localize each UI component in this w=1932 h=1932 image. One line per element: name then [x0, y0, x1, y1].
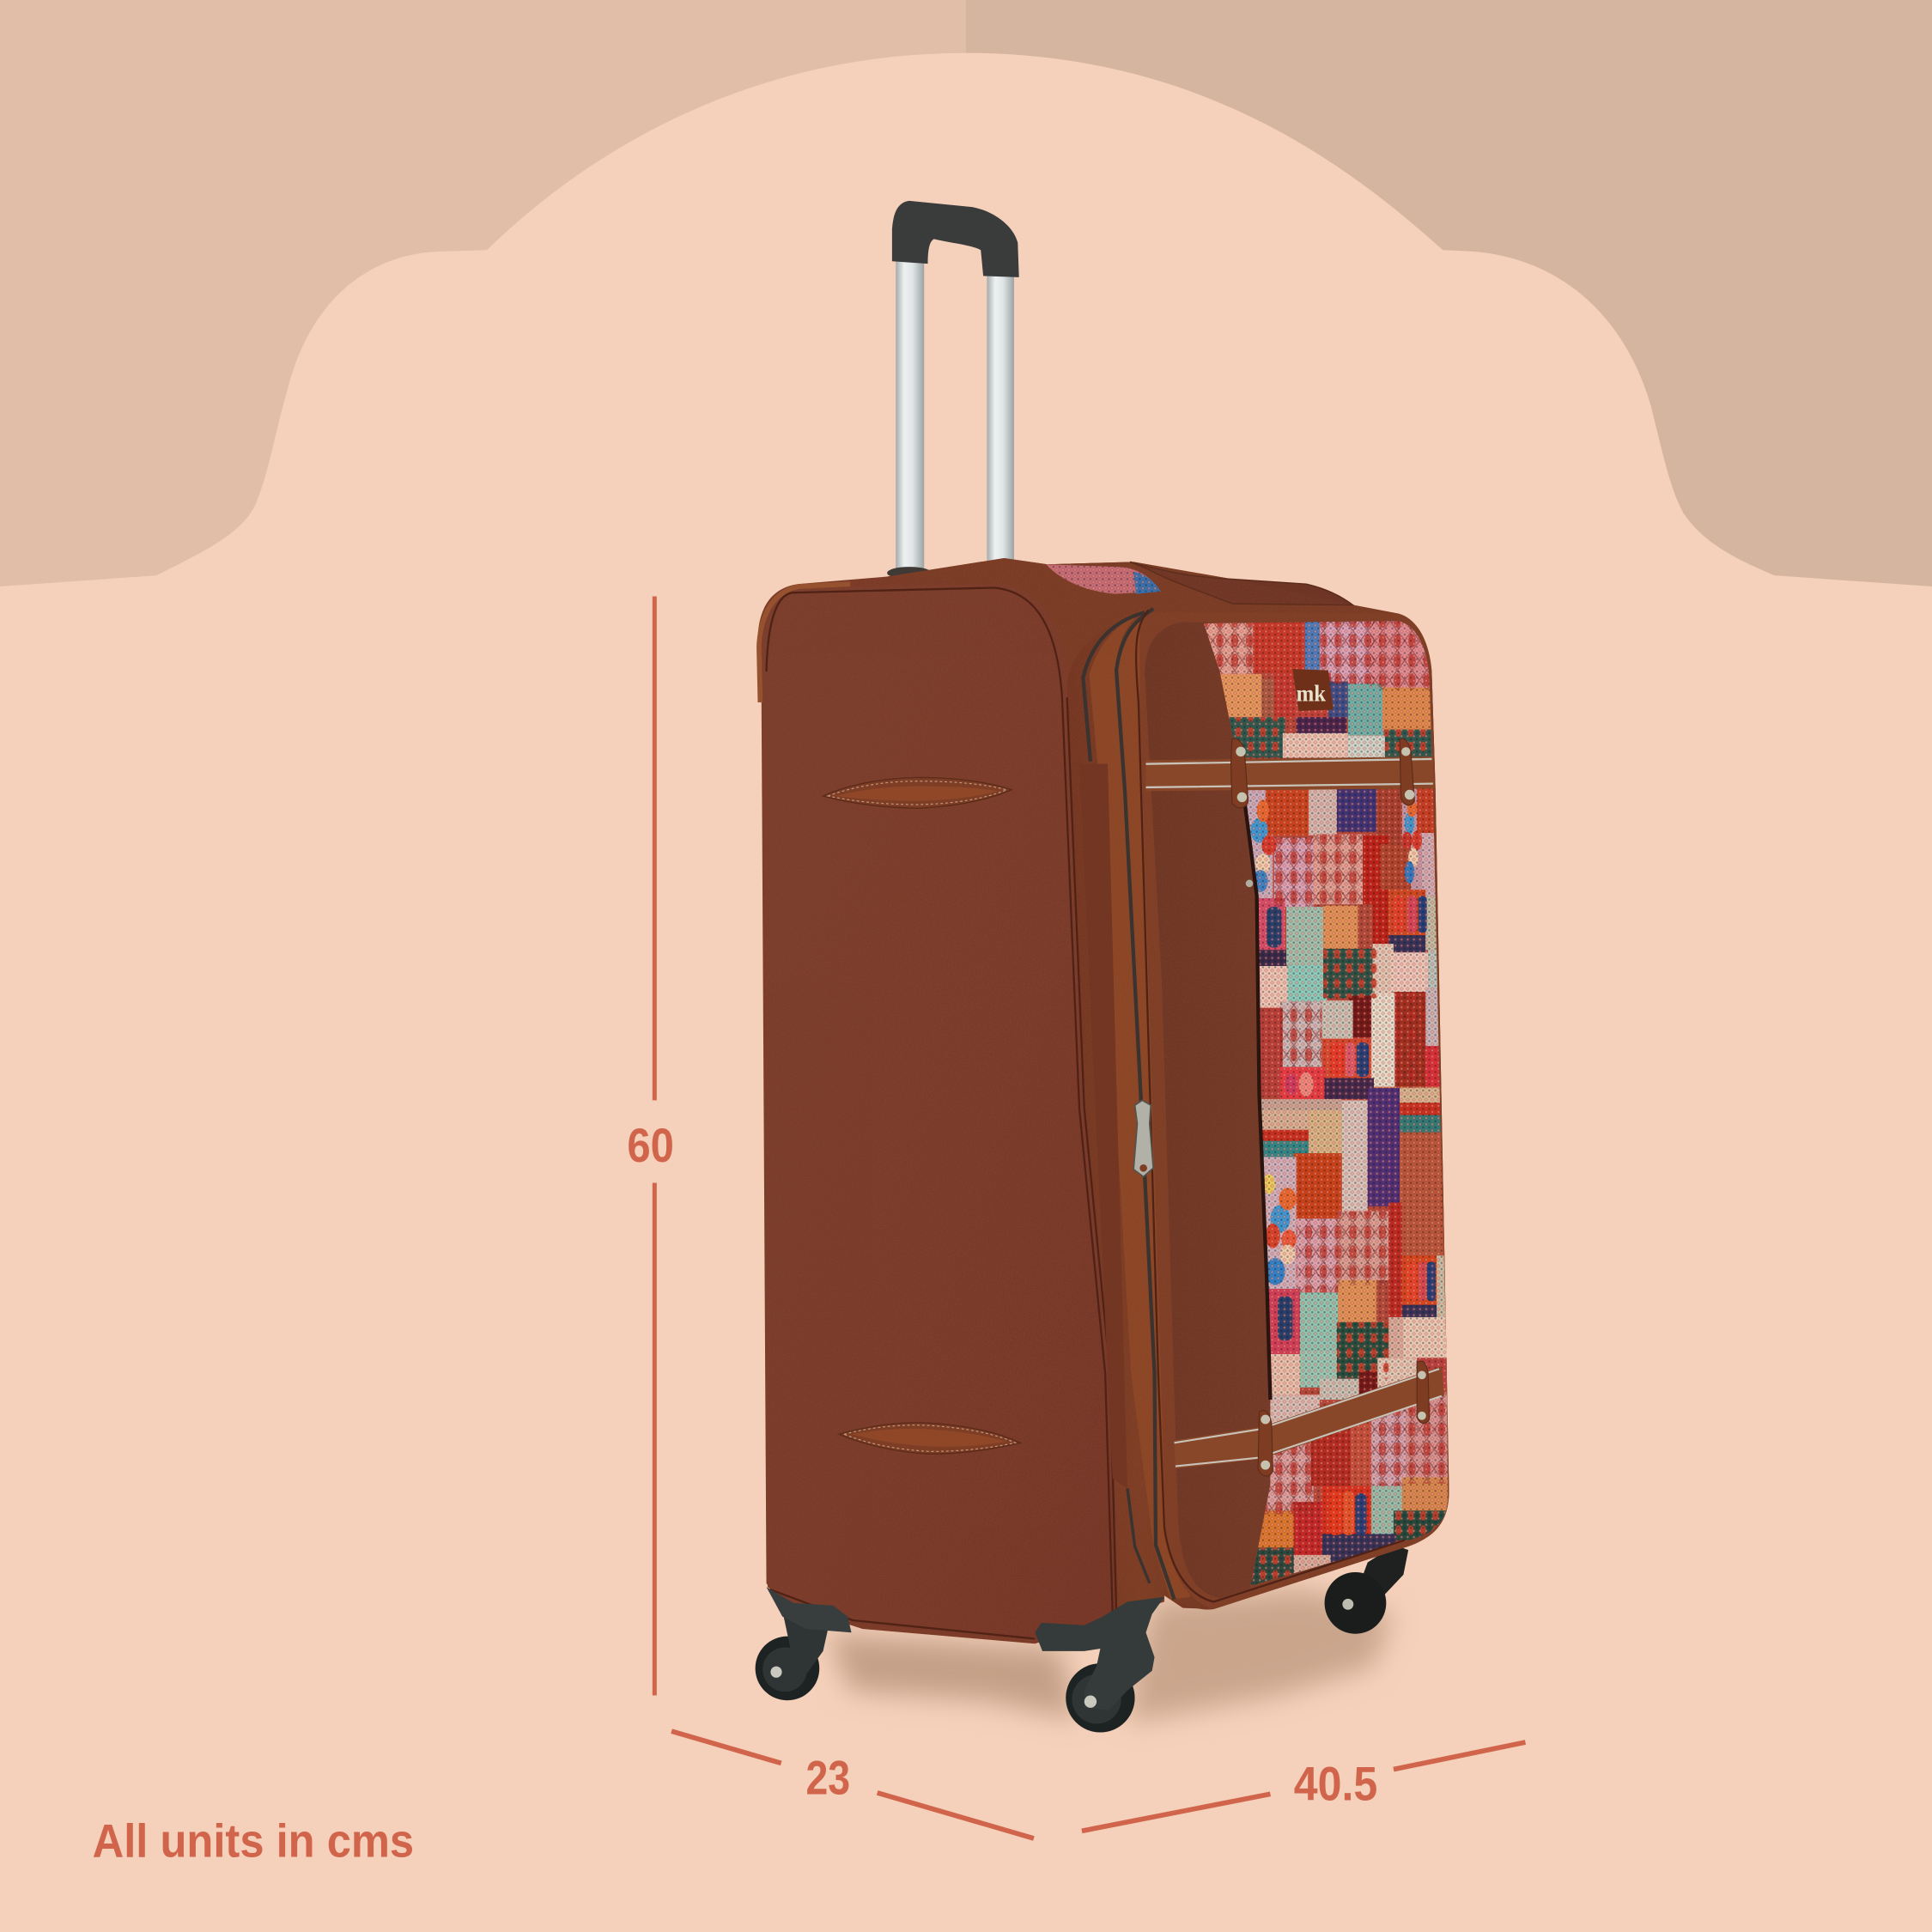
- middle patches: [1238, 788, 1448, 1102]
- orange zip tape: [1089, 612, 1190, 1600]
- arch motifs: [1267, 896, 1436, 1535]
- height line: [653, 597, 657, 1695]
- fork and plate: [1035, 1597, 1164, 1710]
- dimension: width: [1082, 1742, 1525, 1831]
- gusset flap: [1079, 764, 1127, 1488]
- hub: [770, 1667, 782, 1678]
- hub: [1084, 1695, 1097, 1708]
- front-left caster: [756, 1587, 852, 1700]
- patch shadow edge: [1244, 801, 1270, 1400]
- wheel inner: [762, 1648, 807, 1692]
- dimension: depth: [671, 1731, 1034, 1838]
- weave overlay: [1195, 616, 1454, 1601]
- zippers: [1083, 609, 1405, 1601]
- lower strap: [1175, 1361, 1444, 1476]
- lower patches: [1255, 1088, 1449, 1431]
- brand tag: mk: [1297, 680, 1327, 706]
- floor shadow: [828, 1589, 1392, 1722]
- main zipper: [1116, 609, 1175, 1600]
- fork: [773, 1617, 828, 1686]
- front panel: [1139, 612, 1449, 1609]
- printed top pad: [1046, 564, 1161, 594]
- top band: left tone: [0, 0, 966, 592]
- suitcase: [751, 201, 1454, 1733]
- dimension: height: [627, 597, 674, 1695]
- lower side handle: [839, 1423, 1020, 1454]
- depth value: 23: [805, 1750, 850, 1804]
- suitcase body: [757, 558, 1449, 1643]
- grip: [892, 201, 1019, 277]
- units note: All units in cms: [93, 1814, 414, 1867]
- corner plate: [767, 1587, 852, 1632]
- right tube: [987, 271, 1014, 567]
- pink lens motifs: [1203, 616, 1450, 1515]
- brand tag: [1292, 669, 1334, 711]
- width line: [1082, 1742, 1525, 1831]
- side panel: [762, 584, 1119, 1645]
- wheel inner: [1072, 1674, 1121, 1723]
- telescopic handle: [887, 201, 1019, 579]
- front panel piping: [1136, 610, 1405, 1601]
- left tube: [896, 256, 924, 579]
- rear wheel: [1325, 1545, 1408, 1634]
- top patches: [1203, 616, 1438, 757]
- width value: 40.5: [1294, 1756, 1377, 1810]
- height value: 60: [627, 1118, 674, 1172]
- top surface: [887, 558, 1399, 665]
- upper strap: [1146, 738, 1434, 808]
- side rivet: [1246, 880, 1253, 887]
- top grab handle: [1130, 562, 1353, 605]
- wheel: [756, 1637, 819, 1700]
- side panel seams: [767, 587, 1116, 1638]
- ribbed corner piping: [759, 584, 850, 702]
- top band: right tone: [966, 0, 1932, 592]
- front-right caster: [1035, 1597, 1164, 1733]
- tube collar: [887, 567, 932, 579]
- zip gusset: [1067, 610, 1213, 1645]
- zipper pull: [1133, 1100, 1153, 1176]
- wheel: [1066, 1663, 1135, 1733]
- patchwork print: [1195, 616, 1454, 1601]
- texture grain: [1062, 567, 1341, 1522]
- front panel inner: [1145, 623, 1270, 1598]
- diamond motifs: [1250, 799, 1422, 1285]
- second zipper: [1083, 612, 1145, 762]
- upper side handle: [823, 777, 1012, 808]
- bottom patches: [1244, 1392, 1450, 1589]
- green lens motifs: [1226, 717, 1450, 1589]
- depth line: [671, 1731, 1034, 1838]
- lower second zipper: [1127, 1488, 1150, 1583]
